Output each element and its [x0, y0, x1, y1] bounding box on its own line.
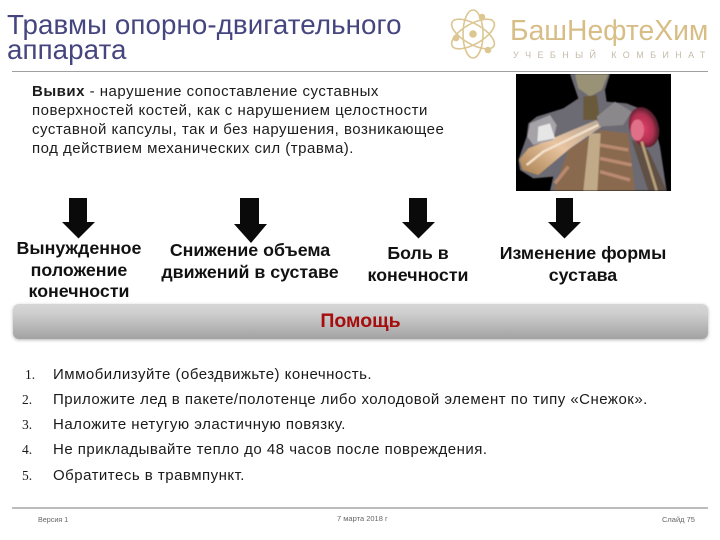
step 4: 4.: [22, 442, 32, 457]
symptom 2: Снижение объема: [170, 240, 330, 260]
step 5: Обратитесь в травмпункт.: [53, 467, 245, 484]
logo: [450, 9, 712, 60]
step 1: 1.: [25, 367, 35, 382]
symptom 3: конечности: [368, 264, 468, 284]
footer rule: [12, 507, 708, 509]
symptom 2: движений в суставе: [161, 262, 339, 282]
step 2: 2.: [22, 392, 32, 407]
photo: shoulder anatomy: [516, 74, 671, 191]
symptom 4: [500, 243, 666, 284]
header rule: [12, 71, 708, 72]
step 4: Не прикладывайте тепло до 48 часов после повреждения.: [53, 441, 488, 458]
definition text: Вывих - нарушение сопоставление суставных: [32, 83, 379, 100]
step 2: Приложите лед в пакете/полотенце либо холодовой элемент по типу «Снежок».: [53, 391, 648, 408]
footer date: 7 марта 2018 г: [337, 514, 388, 523]
symptom 4: сустава: [549, 264, 617, 284]
step 3: 3.: [22, 417, 32, 432]
definition text: под действием механических сил (травма).: [32, 140, 354, 157]
step 1: Иммобилизуйте (обездвижьте) конечность.: [53, 366, 372, 383]
definition text: поверхностей костей, как с нарушением целостности: [32, 102, 428, 119]
step 5: 5.: [22, 468, 32, 483]
symptom 3: [368, 243, 468, 284]
logo name: БашНефтеХим: [510, 14, 708, 46]
first aid list: [22, 366, 648, 484]
footer slide number: Слайд 75: [662, 515, 695, 524]
arrow 3: [402, 198, 435, 238]
arrow 4: [548, 198, 581, 238]
symptom 4: Изменение формы: [500, 243, 666, 263]
symptom 2: [161, 240, 339, 282]
symptom 1: [17, 238, 141, 301]
help banner: Помощь: [320, 310, 401, 332]
title: [7, 9, 402, 65]
title: аппарата: [7, 34, 127, 65]
icon: atom logo: [450, 9, 496, 59]
arrow 1: [62, 198, 95, 238]
definition text: [32, 83, 444, 157]
arrow 2: [234, 198, 267, 243]
step 3: Наложите нетугую эластичную повязку.: [53, 416, 346, 433]
symptom 1: конечности: [29, 281, 129, 301]
help banner: [13, 304, 708, 339]
logo subtitle: УЧЕБНЫЙ КОМБИНАТ: [513, 50, 712, 60]
symptom 1: Вынужденное: [17, 238, 141, 258]
symptom 3: Боль в: [387, 243, 449, 263]
symptom 1: положение: [31, 260, 127, 280]
title: Травмы опорно-двигательного: [7, 9, 402, 40]
footer version: Версия 1: [38, 515, 68, 524]
definition text: суставной капсулы, так и без нарушения, возникающее: [32, 121, 444, 138]
